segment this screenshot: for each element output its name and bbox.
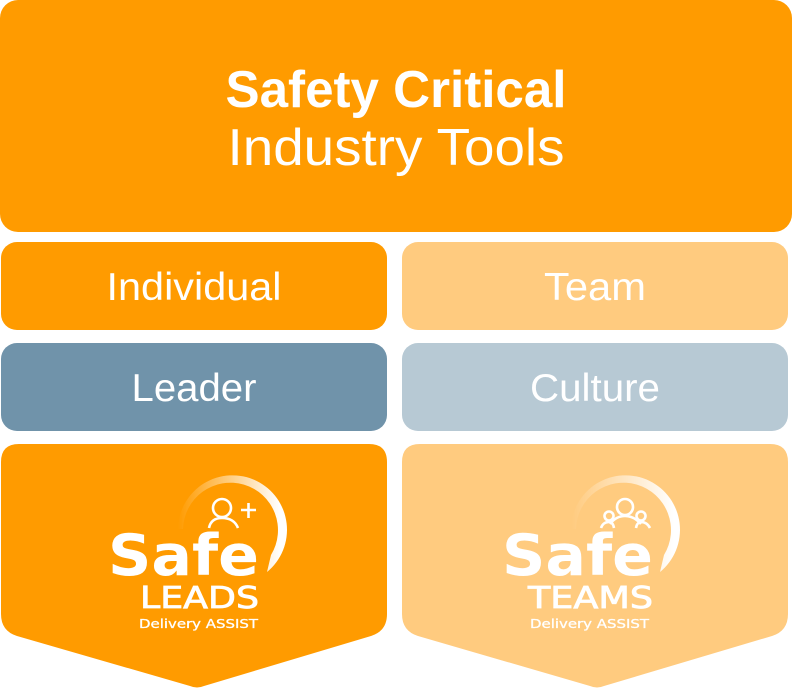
icon: group of people	[601, 499, 650, 528]
panel: team: Team	[544, 266, 646, 309]
logo: safe teams text: TEAMS	[527, 581, 653, 616]
logo: safe teams text: Safe	[502, 523, 653, 589]
icon: arc	[571, 475, 680, 572]
panel: leader	[1, 343, 387, 431]
panel: leader: Leader	[132, 367, 257, 410]
icon: person plus	[209, 499, 256, 528]
logo: safe leads text: LEADS	[140, 581, 259, 616]
logo: safe teams text: Delivery ASSIST	[530, 616, 649, 631]
panel: individual	[1, 242, 387, 330]
logo: safe leads text	[108, 523, 259, 631]
icon: arc	[178, 475, 287, 572]
panel: culture: Culture	[530, 367, 660, 410]
logo: safe leads text: Safe	[108, 523, 259, 589]
logo: safe teams text	[502, 523, 653, 631]
panel: team	[402, 242, 788, 330]
logo: safe leads text: Delivery ASSIST	[139, 616, 258, 631]
panel: safe leads chevron	[1, 444, 387, 688]
panel: safe teams chevron	[402, 444, 788, 688]
title second line: Industry Tools	[228, 119, 564, 177]
panel: individual: Individual	[106, 266, 282, 309]
panel: culture	[402, 343, 788, 431]
title text: Safety Critical	[226, 61, 566, 119]
